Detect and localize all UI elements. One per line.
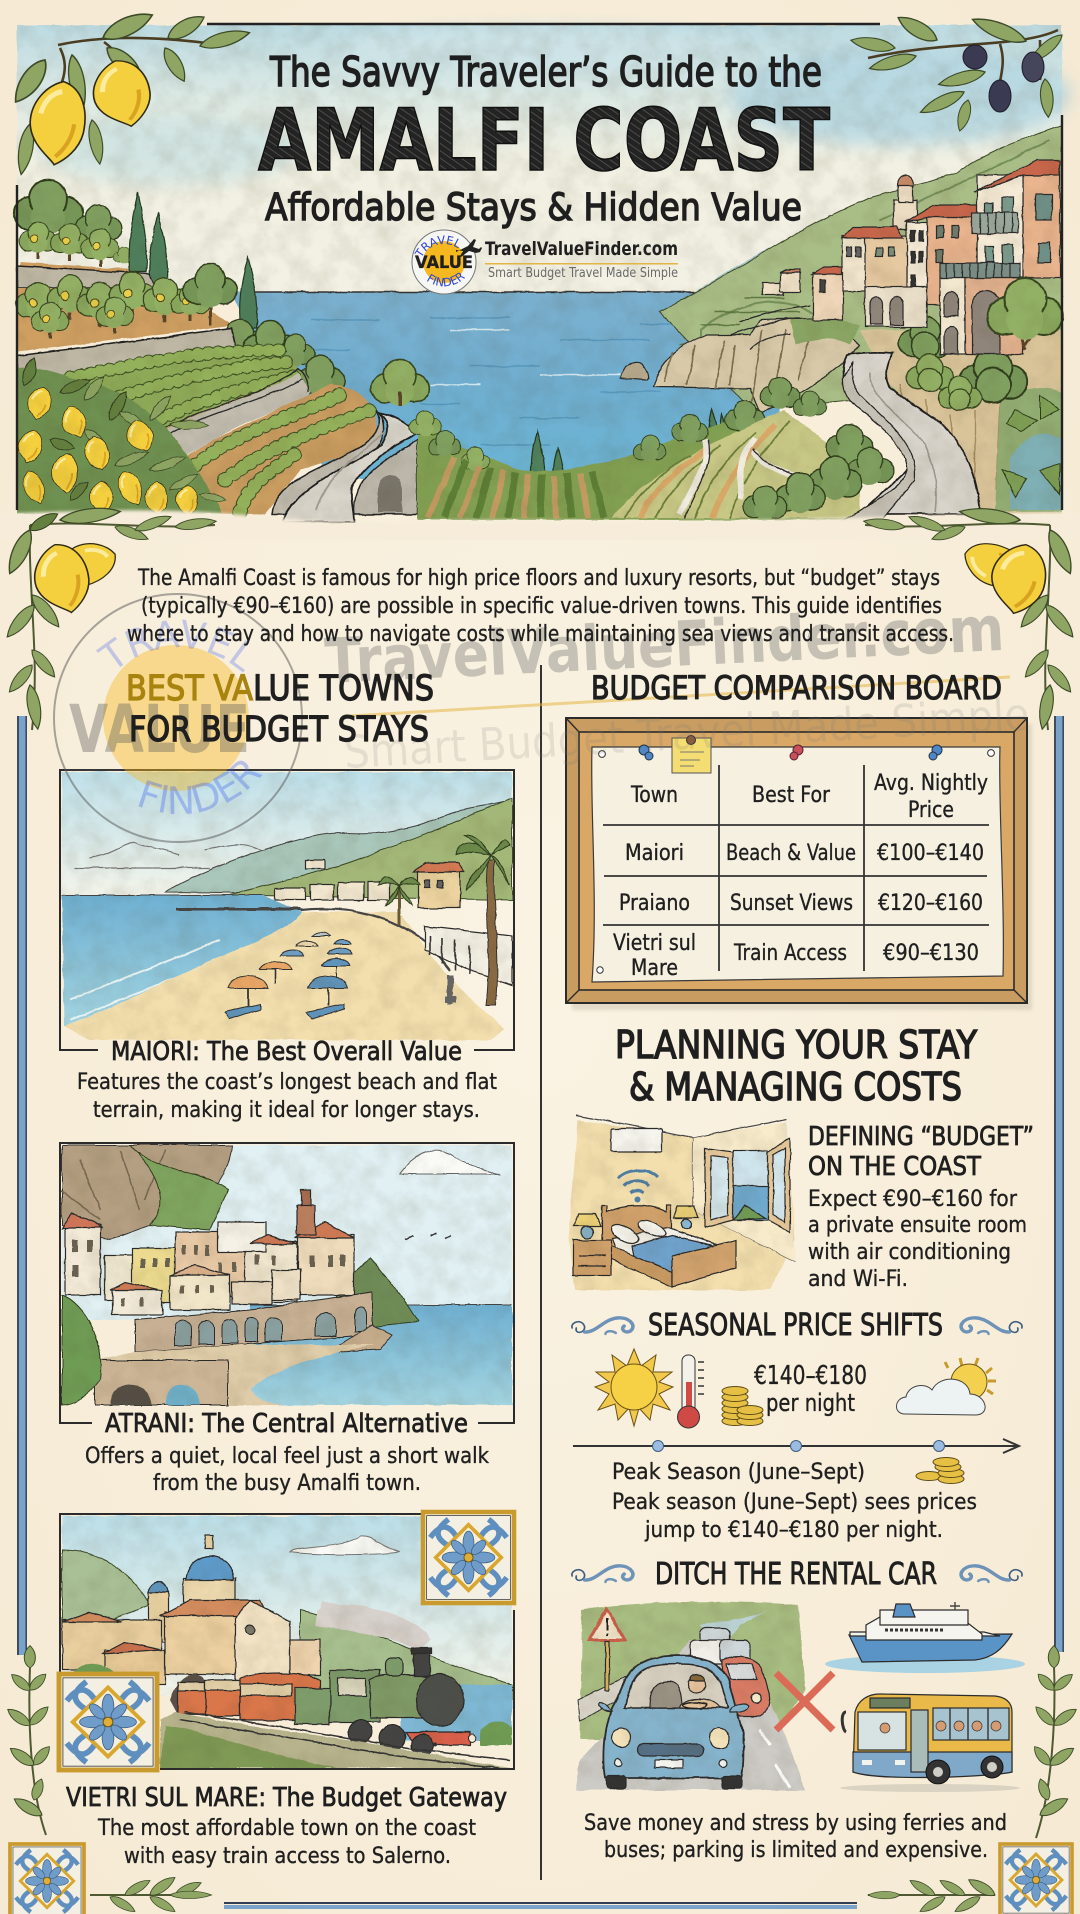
blue car — [599, 1656, 749, 1789]
sky — [17, 25, 1062, 300]
card frame — [60, 1143, 514, 1423]
subtitle: Affordable Stays & Hidden Value — [265, 186, 802, 229]
text block: defining budget: DEFINING “BUDGET” — [808, 1122, 1034, 1152]
sticky note and pins — [597, 736, 994, 973]
buildings — [762, 160, 1060, 354]
hero frame — [17, 24, 1062, 510]
side borders — [18, 716, 1063, 1655]
bottom-left corner tile — [10, 1844, 84, 1914]
text block: defining budget: ON THE COAST — [808, 1152, 981, 1182]
panel: corkboard comparison table — [566, 718, 1032, 1010]
description: Features the coast’s longest beach and flat — [77, 1070, 497, 1095]
lower arcade — [865, 287, 927, 327]
watermark overlay: VALUE — [69, 691, 250, 768]
icon: stacked coins — [722, 1386, 763, 1426]
table text: Best For — [752, 783, 831, 808]
table grid — [603, 765, 989, 971]
grove 2 — [17, 288, 235, 352]
mid building — [927, 217, 977, 305]
text block: defining budget: a private ensuite room — [808, 1213, 1027, 1238]
description: terrain, making it ideal for longer stays. — [93, 1098, 480, 1123]
table text: Price — [908, 798, 954, 823]
base building — [940, 278, 965, 354]
site name and tagline — [485, 238, 678, 281]
balconies — [940, 263, 1020, 278]
peak price label: per night — [766, 1389, 855, 1417]
decorative tile top right — [423, 1512, 514, 1603]
table text: Praiano — [619, 891, 690, 916]
warning sign — [589, 1609, 625, 1691]
card frame — [60, 1514, 514, 1769]
illustration: Vietri sul Mare with train — [62, 1516, 512, 1768]
panel: Vietri sul Mare — [59, 1512, 514, 1869]
description: Offers a quiet, local feel just a short walk — [85, 1444, 489, 1469]
curved terrace wall — [165, 372, 310, 458]
red car — [722, 1657, 770, 1716]
heading: best value towns — [126, 669, 434, 750]
illustration: budget bedroom — [568, 1115, 795, 1290]
bottom-right laurel — [1031, 1646, 1079, 1838]
mid-left lemon branch — [3, 505, 217, 730]
blue foliage — [995, 387, 1062, 512]
panel: Maiori — [60, 770, 514, 1123]
illustration: Atrani village — [60, 1145, 512, 1405]
logo: Travel Value Finder — [412, 230, 482, 294]
wood frame — [566, 718, 1027, 1003]
logo: Travel Value Finder: VALUE — [415, 253, 473, 273]
description: The most affordable town on the coast — [97, 1816, 476, 1841]
decorative tile left — [59, 1674, 157, 1770]
ragged lower edge of the hero — [0, 510, 1080, 540]
table text: Train Access — [733, 941, 847, 966]
icon: thermometer — [678, 1355, 704, 1428]
intro paragraph — [127, 566, 954, 647]
logo: Travel Value Finder: TRAVEL — [414, 235, 459, 256]
timeline arrow — [573, 1439, 1019, 1453]
heading: budget comparison board: BUDGET COMPARISON BOARD — [591, 669, 1002, 707]
right slope — [860, 330, 1062, 514]
distant headland — [647, 240, 860, 318]
centre vineyards — [428, 458, 588, 518]
illustration: bus — [840, 1694, 1020, 1792]
seasonal text: jump to €140–€180 per night. — [644, 1518, 943, 1543]
description: from the busy Amalfi town. — [153, 1471, 421, 1496]
open window — [705, 1138, 790, 1232]
table text: €90–€130 — [883, 941, 979, 966]
illustration: Maiori beach — [62, 772, 512, 1040]
table text: Avg. Nightly — [874, 771, 988, 796]
heading: planning your stay: & MANAGING COSTS — [629, 1065, 962, 1109]
stone wall 1 — [17, 266, 156, 288]
lemon tree foreground — [17, 368, 222, 514]
heading: seasonal price shifts: SEASONAL PRICE SHIFTS — [648, 1308, 943, 1343]
main title: AMALFI COAST — [258, 91, 830, 191]
ditch car description: Save money and stress by using ferries and — [584, 1811, 1007, 1836]
intro paragraph: (typically €90–€160) are possible in specific value-driven towns. This guide identifies — [141, 594, 942, 619]
heading: best value towns: FOR BUDGET STAYS — [129, 710, 429, 750]
right hill — [660, 125, 1062, 410]
table text: Vietri sul — [613, 931, 696, 956]
top-right olive branch — [850, 11, 1066, 132]
road wall left — [272, 410, 384, 514]
vine terrace 1 — [17, 346, 310, 514]
heading: planning your stay: PLANNING YOUR STAY — [615, 1023, 978, 1067]
table text: Town — [630, 783, 678, 808]
sea — [230, 292, 780, 480]
foreshore bushes — [417, 412, 860, 520]
description: with easy train access to Salerno. — [124, 1844, 451, 1869]
air conditioner — [611, 1129, 662, 1152]
table text: Sunset Views — [730, 891, 853, 916]
bed — [602, 1205, 736, 1287]
big building — [1023, 173, 1060, 278]
heading: ditch the rental car: DITCH THE RENTAL CAR — [655, 1557, 937, 1592]
road-side bushes — [743, 424, 893, 521]
left building — [842, 236, 868, 291]
title block — [258, 48, 830, 229]
watermark overlay: TRAVEL — [96, 620, 248, 672]
upper grove trees — [14, 180, 82, 235]
illustration: ferry — [825, 1602, 1025, 1673]
site name and tagline: Smart Budget Travel Made Simple — [488, 266, 678, 281]
train and carriages — [170, 1674, 205, 1715]
palm trees — [486, 860, 497, 1005]
nightstand and lamps — [573, 1206, 699, 1275]
rock in the sea — [620, 362, 648, 380]
peak price label — [754, 1361, 867, 1417]
stone wall 2 — [17, 328, 236, 385]
column divider — [540, 665, 542, 1880]
wifi symbol — [618, 1170, 658, 1193]
caption: MAIORI: The Best Overall Value — [111, 1037, 462, 1067]
bottom-left laurel — [5, 1646, 53, 1835]
table text — [613, 771, 988, 981]
heading: planning your stay — [615, 1023, 978, 1109]
hero illustration: coastal landscape — [14, 25, 1070, 522]
terraces above road — [730, 305, 810, 350]
caption: VIETRI SUL MARE: The Budget Gateway — [66, 1783, 507, 1813]
description — [85, 1444, 489, 1496]
left winding road — [282, 412, 415, 522]
bottom-left branch — [90, 1873, 212, 1914]
traffic queue — [690, 1628, 750, 1664]
paper sheet — [592, 747, 1003, 982]
watermark overlay: FINDER — [138, 760, 262, 814]
cork — [579, 732, 1014, 990]
card frame — [60, 770, 514, 1050]
intro paragraph: where to stay and how to navigate costs while maintaining sea views and transit access. — [127, 622, 954, 647]
mid-right lemon branch — [863, 505, 1078, 730]
text block: defining budget: Expect €90–€160 for — [808, 1187, 1018, 1212]
umbrellas and loungers — [225, 932, 352, 1019]
bottom-right corner tile — [1000, 1844, 1072, 1914]
table text: €100–€140 — [877, 841, 984, 866]
top-left lemon branch — [8, 7, 251, 176]
panel: Atrani — [60, 1143, 514, 1496]
table text: Mare — [631, 956, 678, 981]
description — [77, 1070, 497, 1123]
table text: €120–€160 — [878, 891, 983, 916]
description — [97, 1816, 476, 1869]
vine terrace 2 — [180, 385, 378, 514]
caption: ATRANI: The Central Alternative — [105, 1409, 468, 1439]
watermark overlay — [53, 592, 1031, 843]
tower — [893, 200, 917, 230]
intro paragraph: The Amalfi Coast is famous for high price floors and luxury resorts, but “budget” stays — [137, 566, 940, 591]
seaside bushes — [217, 319, 345, 396]
seasonal text: Peak Season (June–Sept) — [612, 1460, 865, 1485]
seasonal text: Peak season (June–Sept) sees prices — [612, 1490, 977, 1515]
cypress trees — [129, 192, 727, 498]
icon: small coins — [916, 1458, 964, 1484]
illustration: congested road with car — [575, 1602, 806, 1790]
cliffs — [653, 318, 860, 414]
table text: Beach & Value — [726, 841, 856, 866]
site name and tagline: TravelValueFinder.com — [485, 238, 678, 260]
icon: red X — [776, 1673, 833, 1730]
seasonal text — [612, 1460, 977, 1543]
peak price label: €140–€180 — [754, 1361, 867, 1391]
grove 1 — [20, 262, 140, 280]
title line 1: The Savvy Traveler’s Guide to the — [269, 48, 822, 96]
heading: best value towns: BEST VALUE TOWNS — [126, 669, 434, 709]
terraces right — [612, 410, 860, 518]
table text: Maiori — [625, 841, 684, 866]
logo: Travel Value Finder: FINDER — [427, 272, 466, 286]
text block: defining budget: and Wi-Fi. — [808, 1267, 908, 1292]
ditch car description — [584, 1811, 1007, 1863]
text block: defining budget: with air conditioning — [808, 1240, 1011, 1265]
icon: sun behind cloud — [896, 1358, 996, 1415]
text block: defining budget — [808, 1122, 1034, 1292]
bottom-right branch — [868, 1876, 997, 1914]
ditch car description: buses; parking is limited and expensive. — [604, 1838, 988, 1863]
right winding road — [843, 352, 980, 514]
icon: sun — [595, 1349, 673, 1426]
